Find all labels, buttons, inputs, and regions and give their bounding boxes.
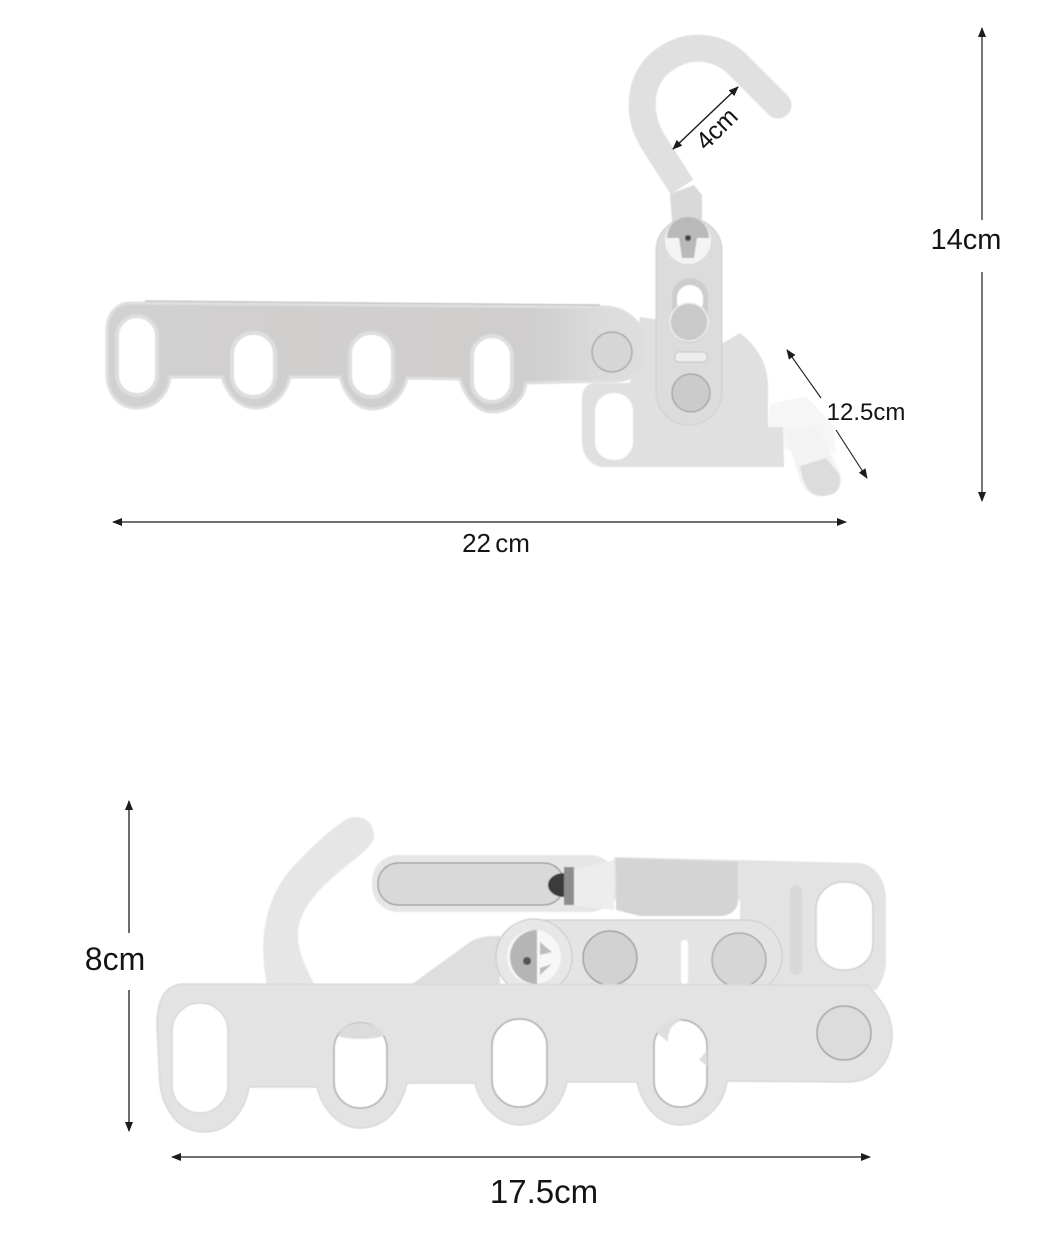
fold rib [790,885,802,975]
lower button [672,374,710,412]
arm pivot [592,332,632,372]
folded arm pivot [817,1006,871,1060]
dimension: 17.5cm width: 17.5cm [490,1173,598,1210]
diagonal neck [412,936,500,984]
dimension: 22cm width: 22 cm [462,528,530,558]
bracket hole [816,882,873,970]
bracket body [614,857,886,990]
dimension: 12.5cm depth [787,350,905,478]
hook tip [764,92,792,118]
long arm [107,303,648,412]
dimension: 4cm hook opening: 4cm [690,102,744,156]
dimension: 12.5cm depth: 12.5cm [827,399,905,426]
folded hook [263,817,374,986]
sliding handle [372,855,616,912]
arm holes [117,316,512,402]
arm top edge [145,301,600,305]
bracket body [582,317,784,467]
bracket hole [595,393,633,460]
folded button 2 [712,933,766,987]
panel: open hanger top view [107,48,841,496]
folded arm holes [172,1003,707,1113]
hook neck [670,185,702,222]
swivel head [665,217,711,264]
clip in hole 4 [656,1020,707,1066]
link slot [681,940,688,984]
darker fold pane [616,858,738,916]
panel: folded hanger [157,817,892,1132]
slot with button [670,278,708,343]
folded link [496,920,782,992]
folded button 1 [583,931,637,985]
small slot [675,352,707,362]
hook [642,48,778,187]
dimension: 8cm height: 8cm [85,941,145,977]
bump in hole 2 [338,1023,384,1039]
swivel head [496,919,572,995]
vertical link [656,218,722,425]
foot plate [768,396,841,496]
dimension: 4cm hook opening [673,87,744,156]
dimension: 14cm height: 14cm [931,224,1001,256]
folded long arm [157,984,892,1132]
